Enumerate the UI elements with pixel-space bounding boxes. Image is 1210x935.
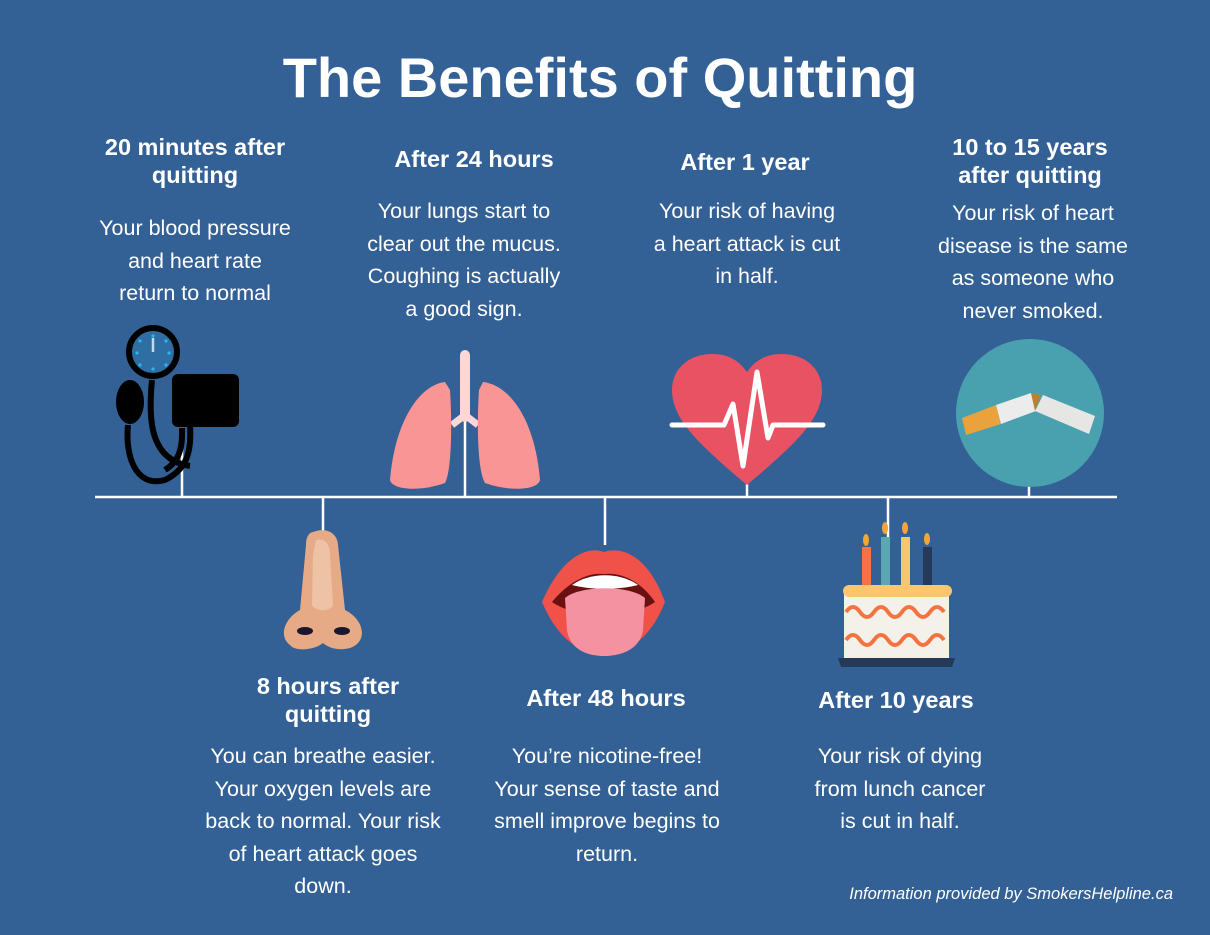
title: The Benefits of Quitting	[283, 46, 917, 109]
icon: heart	[672, 354, 823, 485]
icon: birthday cake	[838, 522, 955, 667]
text: 48 hours: smell improve begins to	[494, 809, 720, 833]
text: 20 minutes	[99, 216, 291, 305]
text: 8 hours: You can breathe easier.	[210, 744, 436, 768]
text: 10 to 15 years	[938, 201, 1128, 322]
icon: mouth	[542, 550, 665, 656]
heading: 8 hours: quitting	[285, 701, 371, 727]
text: 8 hours: Your oxygen levels are	[215, 776, 431, 800]
text: 24 hours: clear out the mucus.	[367, 232, 561, 256]
text: 24 hours: Coughing is actually	[368, 264, 560, 288]
icon: blood pressure monitor	[116, 328, 239, 481]
icon: nose	[284, 530, 362, 649]
footer credit: Information provided by SmokersHelpline.ca	[849, 885, 1173, 903]
text: 8 hours: of heart attack goes	[229, 842, 417, 866]
icon: lungs	[390, 350, 540, 489]
heading: 10 years: After 10 years	[818, 687, 974, 713]
text: 8 hours	[205, 744, 441, 898]
text: 8 hours: back to normal. Your risk	[205, 809, 441, 833]
text: 20 minutes: return to normal	[119, 281, 271, 305]
heading: 24 hours: After 24 hours	[394, 146, 554, 172]
text: 10 to 15 years: Your risk of heart	[952, 201, 1114, 225]
text: 1 year: a heart attack is cut	[654, 232, 840, 256]
heading: 20 minutes	[105, 134, 285, 188]
text: 48 hours: return.	[576, 842, 638, 866]
text: 10 years	[814, 744, 986, 833]
icon: broken cigarette	[956, 339, 1104, 487]
text: 20 minutes: Your blood pressure	[99, 216, 291, 240]
text: 20 minutes: and heart rate	[128, 248, 262, 272]
text: 10 years: Your risk of dying	[818, 744, 982, 768]
text: 10 to 15 years: never smoked.	[962, 298, 1104, 322]
heading: 10 to 15 years: 10 to 15 years	[952, 134, 1108, 160]
text: 10 to 15 years: disease is the same	[938, 234, 1128, 258]
text: 1 year: Your risk of having	[659, 199, 835, 223]
heading: 8 hours: 8 hours after	[257, 673, 399, 699]
text: 48 hours: You’re nicotine-free!	[512, 744, 702, 768]
heading: 10 to 15 years	[952, 134, 1108, 188]
heading: 20 minutes: quitting	[152, 162, 238, 188]
text: 1 year	[654, 199, 840, 288]
heading: 20 minutes: 20 minutes after	[105, 134, 285, 160]
text: 10 to 15 years: as someone who	[952, 266, 1114, 290]
text: 10 years: is cut in half.	[840, 809, 960, 833]
text: 8 hours: down.	[294, 874, 352, 898]
heading: 1 year: After 1 year	[680, 149, 810, 175]
text: 48 hours: Your sense of taste and	[494, 776, 720, 800]
text: 24 hours: a good sign.	[405, 296, 523, 320]
heading: 10 to 15 years: after quitting	[958, 162, 1102, 188]
text: 48 hours	[494, 744, 720, 866]
text: 10 years: from lunch cancer	[815, 776, 985, 800]
heading: 48 hours: After 48 hours	[526, 685, 686, 711]
text: 1 year: in half.	[715, 264, 779, 288]
timeline axis	[95, 400, 1117, 545]
heading: 8 hours	[257, 673, 399, 727]
text: 24 hours	[367, 199, 561, 320]
text: 24 hours: Your lungs start to	[378, 199, 550, 223]
